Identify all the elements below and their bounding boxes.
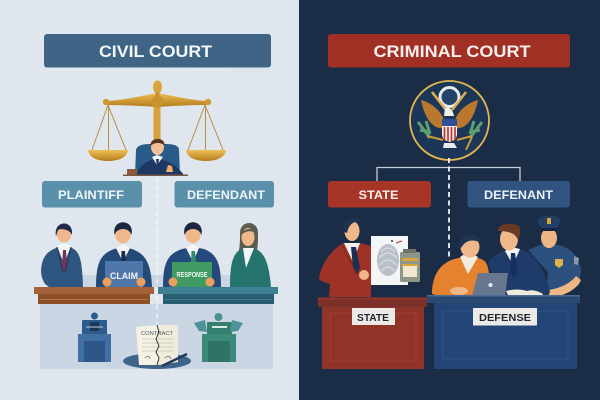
title: civil court [44, 34, 271, 68]
table: defendant desk [158, 287, 278, 304]
panel: criminal court [299, 0, 600, 400]
figure: defendant in orange [432, 234, 489, 296]
desk: defense [427, 295, 580, 369]
figure: defendant with response sign [163, 222, 221, 287]
figure: police officer [528, 216, 581, 297]
title: civil court: CIVIL COURT [99, 42, 213, 61]
placard: state: STATE [357, 312, 389, 324]
sign: response: RESPONSE [176, 270, 208, 279]
evidence: fingerprint board [371, 236, 408, 285]
icon: torn contract [123, 325, 191, 369]
divider: dashed centre line [156, 177, 158, 340]
label: state: STATE [358, 190, 399, 202]
label: defendant: DEFENANT [484, 190, 553, 202]
figure: prosecutor with evidence [319, 218, 420, 297]
icon: defendant station [194, 313, 243, 362]
connector: dashed centre line [448, 158, 450, 260]
figure: defense lawyer [488, 224, 550, 296]
placard: defense: DEFENSE [479, 312, 531, 324]
panel: civil court [0, 0, 299, 400]
table: plaintiff desk [34, 287, 154, 304]
label: plaintiff [42, 181, 142, 208]
label: defendant [468, 181, 570, 208]
evidence: clipboard [400, 249, 420, 282]
figure: woman defendant counsel [230, 223, 271, 287]
sign: claim: CLAIM [110, 271, 138, 282]
icon: judge [123, 139, 188, 176]
icon: laptop [472, 273, 508, 296]
backing band behind parties [60, 275, 240, 287]
placard: defense [473, 308, 537, 326]
icon: open book [506, 290, 543, 299]
icon: torn contract: CONTRACT [141, 331, 174, 337]
title: criminal court [328, 34, 570, 68]
connector: bracket [377, 168, 520, 181]
title: criminal court: CRIMINAL COURT [374, 42, 531, 61]
figure: plaintiff counsel [41, 223, 83, 287]
label: state [328, 181, 431, 208]
icon: eagle seal [410, 81, 489, 160]
desk: state [318, 298, 427, 369]
label: defendant: DEFENDANT [187, 190, 265, 202]
label: plaintiff: PLAINTIFF [58, 190, 124, 202]
icon: plaintiff station [78, 312, 111, 362]
label: defendant [174, 181, 274, 208]
figure: plaintiff with claim sign [96, 222, 152, 287]
lower well area [40, 304, 273, 369]
icon: scales of justice [88, 80, 226, 161]
